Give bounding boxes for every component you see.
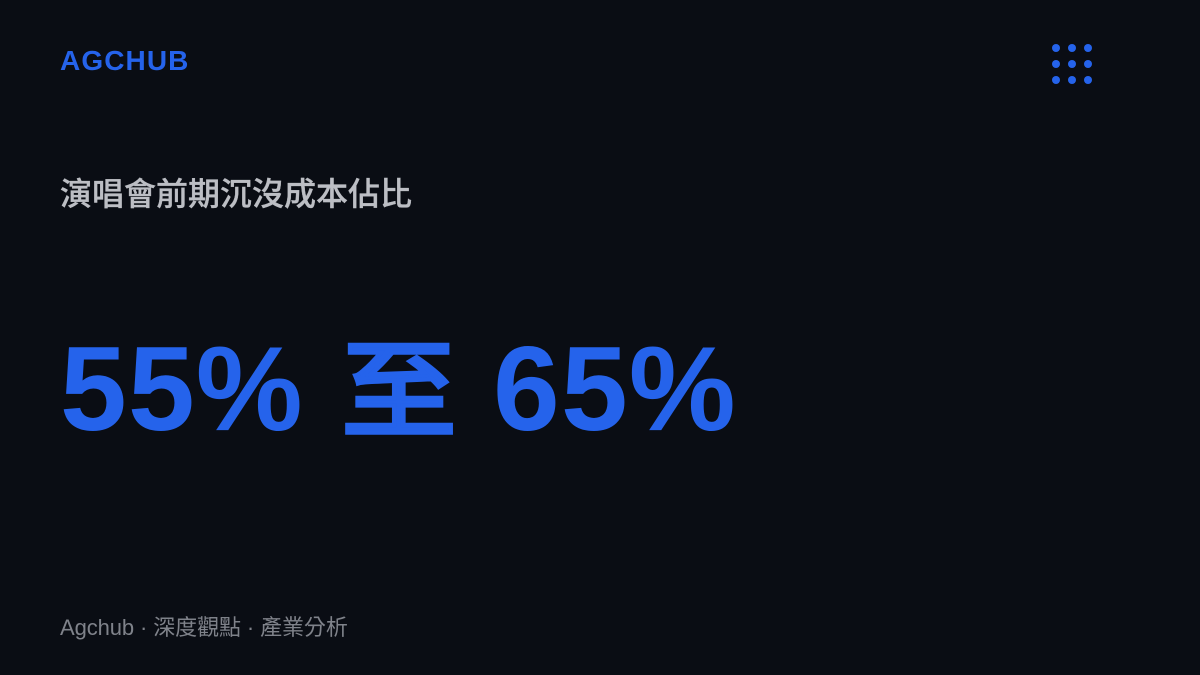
big statistic xyxy=(60,322,737,456)
big statistic: 至 xyxy=(341,333,457,451)
big statistic: 65% xyxy=(493,322,737,456)
icon: dot grid xyxy=(1052,44,1092,84)
big statistic: 55% xyxy=(60,322,304,456)
heading: 演唱會前期沉沒成本佔比 xyxy=(60,176,412,212)
brand logo text: AGCHUB xyxy=(60,45,189,76)
footer text: Agchub · 深度觀點 · 產業分析 xyxy=(60,615,348,640)
